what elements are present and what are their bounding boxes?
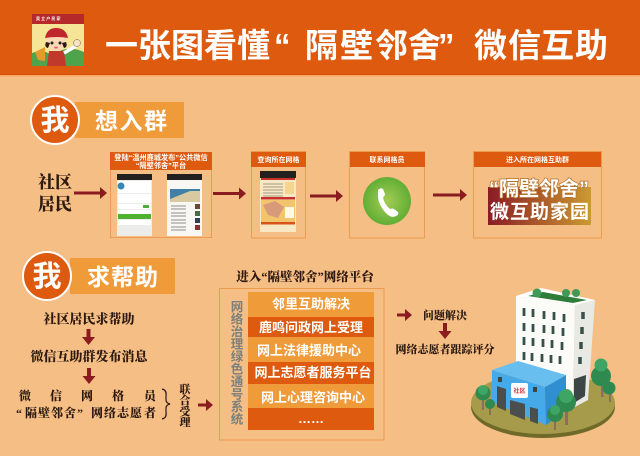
vertical label: 络 [231, 312, 244, 326]
header banner [0, 0, 640, 76]
title: 隔壁邻舍 [305, 27, 441, 64]
arrow [74, 187, 107, 199]
step 1: login platform: “隔壁邻舍”平台 [136, 161, 186, 170]
vertical label: 系 [231, 399, 243, 414]
title: ” [438, 27, 454, 64]
vertical label: 通 [231, 374, 244, 389]
platform title: 进入“隔壁邻舍”网络平台 [236, 269, 375, 284]
start label: 社区居民: 社区 [38, 172, 72, 192]
title: “ [274, 27, 290, 64]
banner: 隔壁邻舍微互助家园: “隔壁邻舍” [489, 176, 589, 200]
logo: cartoon mascot [32, 14, 84, 66]
outcome texts: 问题解决 [423, 308, 467, 322]
title: 微信互助 [474, 27, 608, 64]
step 2: find grid [251, 152, 306, 238]
list rows: …… [298, 411, 324, 426]
flow: help steps: 微信网格员 [19, 388, 158, 403]
section heading: 我想入群: 想入群 [95, 108, 168, 134]
illustration: community building [471, 288, 616, 438]
list rows [248, 292, 374, 430]
step 1: login platform: 登陆“温州鹿城发布”公共微信 [114, 153, 208, 162]
vertical label: 色 [231, 362, 244, 376]
phone screenshot: account page [117, 174, 152, 236]
flow: help steps: “隔壁邻舍”网络志愿者 [16, 405, 156, 420]
vertical label: 号 [231, 388, 243, 402]
vertical label: 理 [231, 338, 244, 352]
illustration: community building: 社区 [514, 387, 526, 395]
step 4: join group [474, 152, 602, 238]
panel: platform list [220, 288, 384, 440]
label: 联合受理: 合 [180, 393, 190, 407]
label: 联合受理 [180, 382, 190, 429]
vertical label: 统 [231, 412, 244, 426]
step 3: contact grid worker [350, 152, 425, 238]
trees [482, 400, 484, 410]
icon: green phone [363, 177, 411, 225]
phone screenshot: article list [167, 174, 202, 236]
logo: cartoon mascot: 奥 立 户 民 家 [36, 15, 60, 21]
vertical label: 网 [231, 300, 243, 314]
flow: help steps [16, 312, 158, 420]
list rows: 邻里互助解决 [272, 296, 350, 312]
title [105, 27, 608, 64]
brace [162, 389, 170, 419]
tower [516, 296, 575, 400]
start label: 社区居民 [38, 172, 72, 214]
label: 联合受理: 理 [180, 415, 190, 429]
label: 联合受理: 联 [180, 382, 190, 396]
community centre [492, 370, 546, 425]
section heading: 我求帮助: 我 [32, 260, 62, 293]
section heading: 我想入群 [31, 96, 184, 144]
vertical label: 绿 [231, 349, 244, 364]
island [471, 376, 615, 438]
arrow [397, 309, 412, 321]
flow: help steps: 社区居民求帮助 [43, 312, 135, 326]
arrow [310, 190, 343, 202]
roof trees [532, 288, 542, 298]
section heading: 我求帮助 [23, 252, 175, 300]
step 4: join group: 进入所在网格互助群 [506, 155, 569, 164]
section heading: 我求帮助: 求帮助 [87, 264, 159, 290]
label: 联合受理: 受 [180, 404, 190, 418]
step 2: find grid: 查询所在网格 [258, 155, 300, 164]
list rows: 网上志愿者服务平台 [254, 365, 372, 380]
flow: help steps: 微信互助群发布消息 [30, 349, 148, 364]
arrow [213, 188, 246, 200]
vertical label: 治 [231, 324, 244, 339]
title: 一张图看懂 [105, 27, 270, 64]
list rows: 鹿鸣问政网上受理 [259, 320, 363, 335]
start label: 社区居民: 居民 [38, 194, 72, 214]
step 3: contact grid worker: 联系网格员 [370, 155, 404, 164]
outcome texts [396, 308, 494, 356]
outcome texts: 网络志愿者跟踪评分 [396, 342, 494, 356]
windows [524, 308, 564, 364]
arrow [198, 399, 213, 411]
arrow [433, 189, 467, 201]
list rows: 网上心理咨询中心 [261, 390, 365, 405]
banner: 隔壁邻舍微互助家园 [488, 176, 591, 225]
phone screenshot: grid map [260, 171, 296, 232]
step 1: login platform [110, 152, 212, 238]
section heading: 我想入群: 我 [40, 104, 70, 137]
vertical label [231, 300, 244, 426]
banner: 隔壁邻舍微互助家园: 微互助家园 [490, 200, 590, 223]
list rows: 网上法律援助中心 [257, 343, 361, 358]
